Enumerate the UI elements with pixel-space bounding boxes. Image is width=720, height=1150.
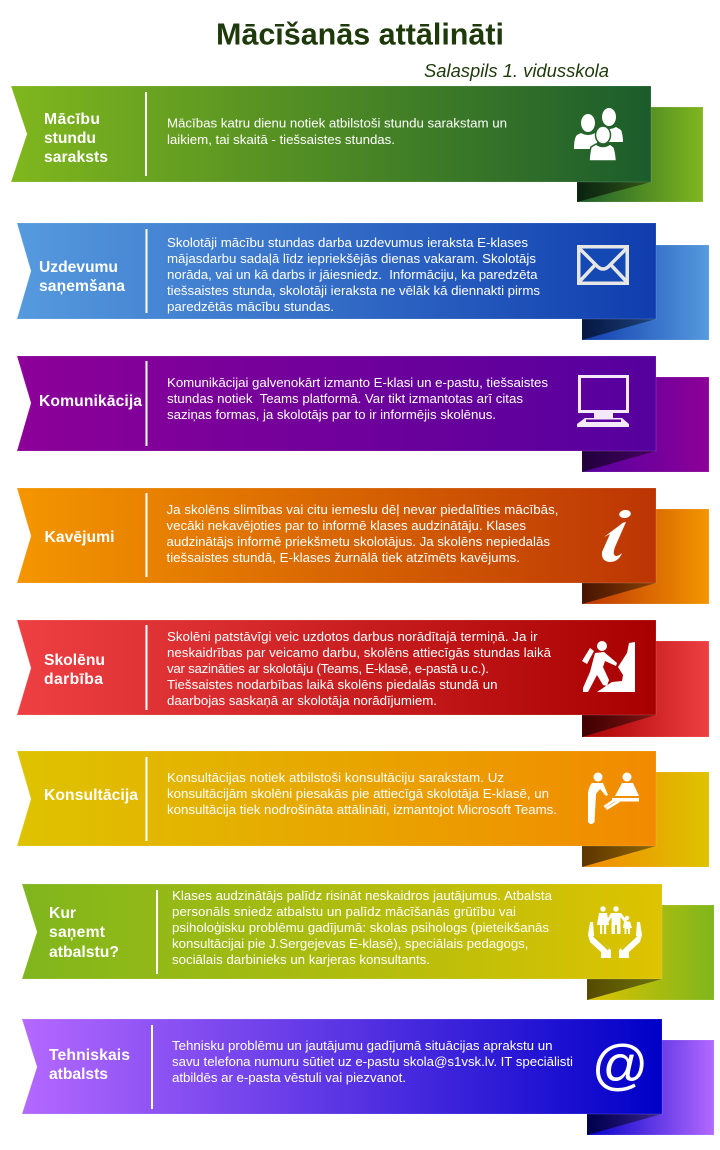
title: Mācīšanās attālināti (216, 18, 504, 52)
ribbon fold (582, 583, 656, 604)
text block: Tiešsaistes nodarbības laikā skolēns piedalās stundā un (167, 677, 498, 692)
heading (44, 652, 105, 688)
ribbon fold (587, 979, 662, 1000)
heading: Uzdevumu (39, 259, 118, 276)
panel: Komunikācija (17, 356, 709, 472)
ribbon back (587, 905, 714, 1000)
ribbon back (582, 509, 709, 604)
ribbon fold (577, 182, 651, 202)
ribbon back (577, 107, 703, 202)
text block: audzinātājs informē priekšmetu skolotājus. Ja skolēns nepiedalās (166, 534, 550, 549)
text block: vecāki nekavējoties par to informē klases audzinātāju. Klases (166, 518, 526, 533)
icon: computer (577, 375, 629, 427)
ribbon fold (587, 1114, 662, 1135)
text block: Tehnisku problēmu un jautājumu gadījumā situācijas aprakstu un (172, 1038, 552, 1053)
icon: climber (582, 641, 635, 692)
text block: savu telefona numuru sūtiet uz e-pastu skola@s1vsk.lv. IT speciālisti (172, 1054, 573, 1069)
ribbon front (17, 751, 656, 846)
heading: Skolēnu (44, 652, 105, 669)
text block: var sazināties ar skolotāju (Teams, E-klasē, e-pastā u.c.). (167, 661, 489, 676)
icon: information (602, 509, 631, 562)
heading: saņemt (49, 924, 106, 941)
text block: Ja skolēns slimības vai citu iemeslu dēļ nevar piedalīties mācībās, (166, 502, 558, 517)
text block: konsultācijai pie J.Sergejevas E-klasē), speciālais pedagogs, (172, 936, 528, 951)
text block (167, 116, 507, 147)
text block: Konsultācijas notiek atbilstoši konsultāciju sarakstam. Uz (167, 770, 504, 785)
panel: Mācību stundu saraksts (11, 86, 703, 202)
ribbon back (587, 1040, 714, 1135)
text block: atbildēs ar e-pasta vēstuli vai piezvanot. (172, 1070, 406, 1085)
ribbon back (582, 245, 709, 340)
text block (167, 375, 548, 422)
text block: konsultācijām skolēni piesakās pie attiecīgā skolotāja E-klasē, un (167, 786, 549, 801)
text block: konsultācija tiek nodrošināta attālināti, izmantojot Microsoft Teams. (167, 802, 557, 817)
heading: saņemšana (39, 278, 125, 295)
heading (44, 111, 108, 166)
ribbon fold (582, 319, 656, 340)
text block: personāls sniedz atbalstu un palīdz mācīšanās grūtību vai (172, 904, 516, 919)
text block (167, 770, 557, 817)
ribbon front (17, 356, 656, 451)
text block: tiešsaistes stundā, E-klases žurnālā tiek atzīmēts kavējums. (166, 550, 520, 565)
heading: Kavējumi (44, 529, 114, 546)
text block (166, 502, 558, 565)
text block: mājasdarbu sadaļā līdz iepriekšējās dienas vakaram. Skolotājs (167, 251, 536, 266)
ribbon back (582, 641, 709, 737)
ribbon front (11, 86, 651, 182)
text block: saziņas formas, ja skolotājs par to ir informējis skolēnus. (167, 407, 496, 422)
icon: people (574, 108, 623, 161)
heading (39, 259, 125, 295)
text block (172, 888, 553, 967)
text block: Skolotāji mācību stundas darba uzdevumus ieraksta E-klases (167, 235, 528, 250)
text block: norāda, vai un kā darbs ir jāiesniedz. Informāciju, ka paredzēta (167, 267, 538, 282)
heading: Mācību (44, 111, 100, 128)
icon: consultation (588, 772, 639, 824)
text block (172, 1038, 573, 1085)
ribbon back (582, 772, 709, 867)
ribbon fold (582, 715, 656, 737)
text block: Klases audzinātājs palīdz risināt neskaidros jautājumus. Atbalsta (172, 888, 553, 903)
panel: Kavējumi (17, 488, 709, 604)
heading: atbalstu? (49, 944, 119, 961)
text block: Skolēni patstāvīgi veic uzdotos darbus norādītajā termiņā. Ja ir (167, 629, 538, 644)
subtitle: Salaspils 1. vidusskola (424, 60, 609, 81)
panel: Skolēnu darbība (17, 620, 709, 737)
ribbon front (17, 223, 656, 319)
heading: Konsultācija (44, 787, 138, 804)
heading: saraksts (44, 149, 108, 166)
ribbon front (22, 884, 662, 979)
panel: Kur saņemt atbalstu? (22, 884, 714, 1000)
ribbon fold (582, 846, 656, 867)
text block: sociālais darbinieks un karjeras konsultants. (172, 952, 430, 967)
panel: Konsultācija (17, 751, 709, 867)
text block: tiešsaistes stunda, skolotāji ieraksta ne vēlāk kā diennakti pirms (167, 283, 540, 298)
panel: Tehniskais atbalsts (22, 1019, 714, 1135)
heading: Tehniskais (49, 1047, 130, 1064)
text block (167, 629, 552, 708)
heading: Komunikācija (39, 393, 142, 410)
text block (167, 235, 540, 314)
heading: atbalsts (49, 1066, 108, 1083)
heading (49, 1047, 130, 1083)
text block: psiholoģisku problēmu gadījumā: skolas psihologs (pieteikšanās (172, 920, 549, 935)
text block: paredzētās mācību stundas. (167, 299, 334, 314)
ribbon front (17, 620, 656, 715)
ribbon front (22, 1019, 662, 1114)
text block: neskaidrības par veicamo darbu, skolēns attiecīgās stundas laikā (167, 645, 552, 660)
text block: laikiem, tai skaitā - tiešsaistes stundas. (167, 132, 395, 147)
panel: Uzdevumu saņemšana (17, 223, 709, 340)
text block: Mācības katru dienu notiek atbilstoši stundu sarakstam un (167, 116, 507, 130)
text block: Komunikācijai galvenokārt izmanto E-klasi un e-pastu, tiešsaistes (167, 375, 548, 390)
icon: at sign: @ (592, 1033, 648, 1096)
icon: family in hands (588, 906, 642, 958)
ribbon front (17, 488, 656, 583)
icon: envelope (577, 245, 629, 285)
heading: stundu (44, 130, 96, 147)
ribbon back (582, 377, 709, 472)
heading: Kur (49, 905, 76, 922)
heading: darbība (44, 671, 103, 688)
ribbon fold (582, 451, 656, 472)
heading (49, 905, 119, 961)
text block: daarbojas saskaņā ar skolotāja norādījumiem. (167, 693, 437, 708)
text block: stundas notiek Teams platformā. Var tikt izmantotas arī citas (167, 391, 523, 406)
